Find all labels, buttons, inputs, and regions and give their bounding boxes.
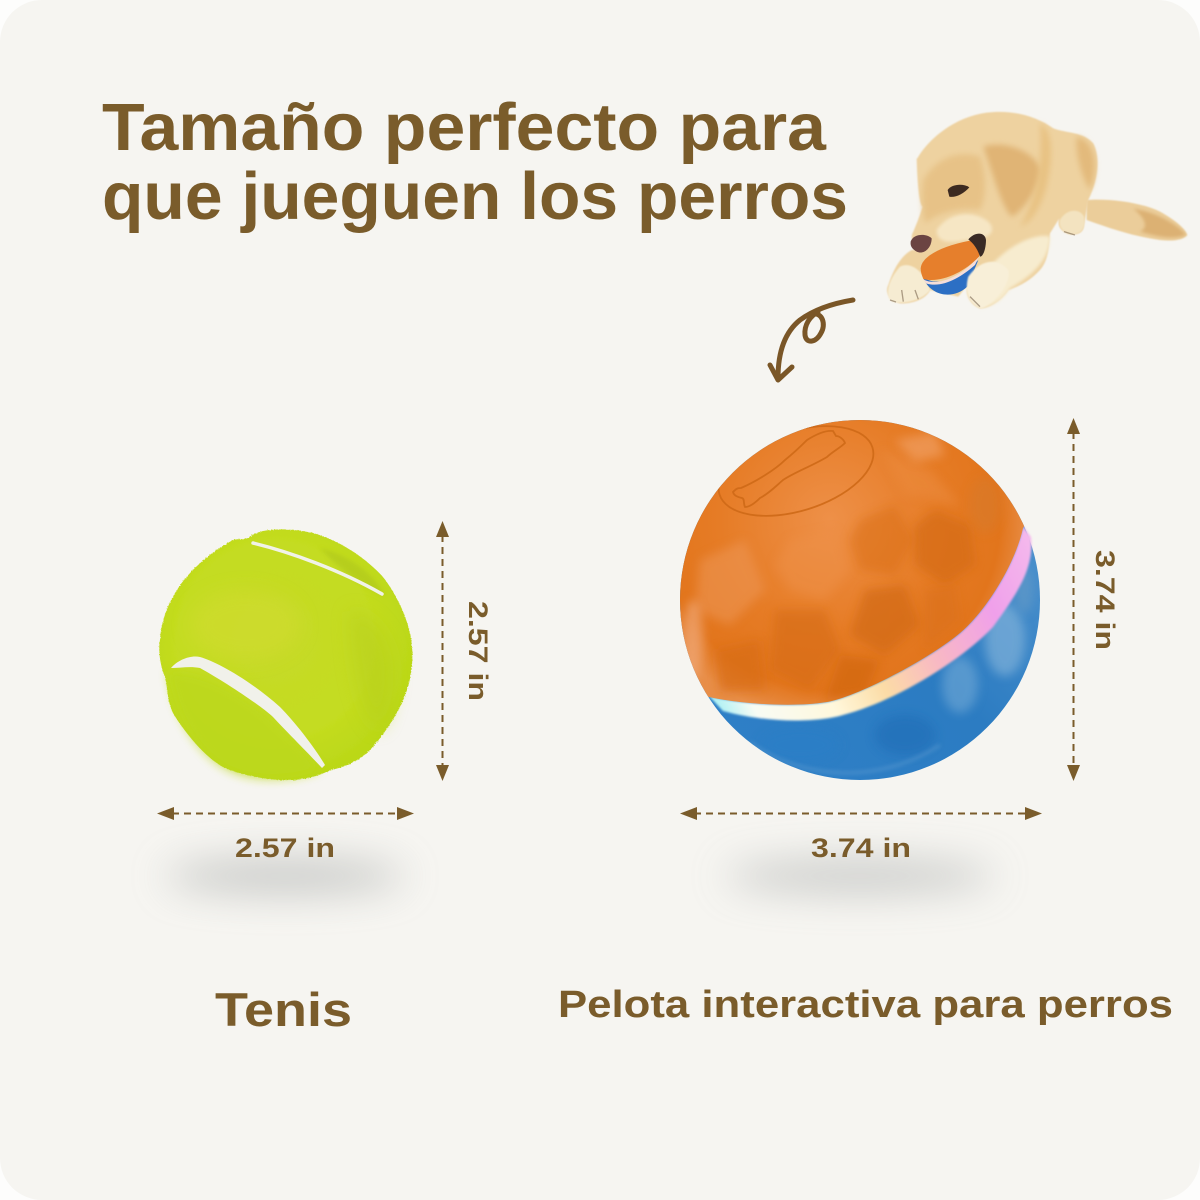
dog face shading	[922, 154, 985, 223]
LED light band	[709, 526, 1031, 721]
caption: Tenis: Tenis	[215, 983, 352, 1036]
tennis ball upper seam	[253, 543, 382, 594]
title: Tamaño perfecto para	[102, 90, 827, 165]
bone outline	[733, 431, 845, 507]
dog nose	[911, 235, 932, 253]
icon: dog chewing the ball	[887, 112, 1187, 308]
dog light chest and paw	[967, 236, 1050, 307]
icon: curly arrow	[770, 300, 853, 380]
interactive ball	[680, 420, 1040, 780]
tennis ball felt	[159, 529, 412, 780]
title	[102, 90, 848, 234]
ball orange upper half	[680, 420, 1024, 705]
dog muzzle highlight	[937, 214, 992, 242]
dimension: tennis height arrow	[436, 521, 449, 781]
dog left paw	[888, 265, 930, 303]
dog ball	[921, 241, 979, 295]
dimension: tennis width arrow	[157, 807, 414, 820]
dog mouth	[968, 234, 986, 257]
label: tennis width: 2.57 in	[235, 833, 335, 863]
dimension: ball height arrow	[1067, 418, 1080, 781]
tennis ball warm highlight	[190, 590, 300, 660]
dog eye	[948, 185, 969, 197]
caption: interactive ball: Pelota interactiva para perros	[558, 984, 1173, 1026]
dog right paw	[967, 262, 1009, 308]
dog back shading	[1020, 123, 1051, 227]
shadow: interactive ball	[725, 860, 995, 892]
tennis ball right shading	[350, 610, 393, 730]
shadow: tennis ball	[165, 860, 405, 892]
tennis ball upper piece shading	[320, 548, 385, 596]
dog tail	[1087, 200, 1187, 241]
tennis ball lower shading	[168, 671, 320, 779]
tennis ball	[159, 529, 412, 780]
dimension: ball width arrow	[680, 807, 1042, 820]
dog rear paw	[1060, 211, 1084, 234]
orange dimples	[683, 432, 1001, 700]
ball blue lower half	[680, 420, 1040, 780]
dog ear	[983, 145, 1042, 217]
tennis ball lower seam	[171, 657, 325, 768]
label: ball width: 3.74 in	[811, 833, 911, 863]
blue dimples	[750, 566, 1034, 773]
label: ball height: 3.74 in	[1090, 550, 1120, 650]
bone emblem	[718, 425, 874, 517]
dog body	[887, 112, 1098, 308]
dog tail tip shade	[1133, 208, 1186, 237]
title: que jueguen los perros	[102, 159, 848, 234]
label: tennis height: 2.57 in	[463, 601, 493, 701]
dog paw toes	[890, 232, 1075, 307]
emblem ring	[718, 425, 874, 517]
